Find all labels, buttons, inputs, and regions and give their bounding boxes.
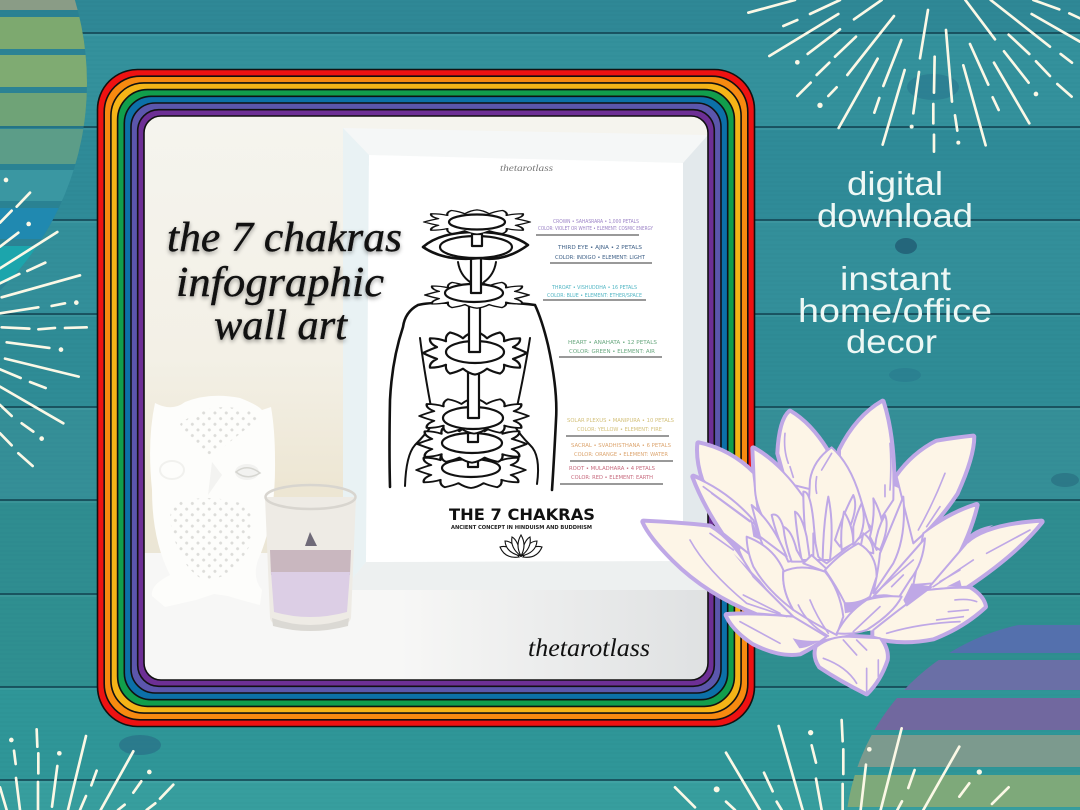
crown label: CROWN • SAHASRARA • 1,000 PETALS bbox=[553, 219, 639, 225]
starburst: bottom left bbox=[0, 729, 173, 810]
third eye chakra bbox=[423, 232, 528, 259]
side text: digital download, instant home/office decor: instant bbox=[840, 260, 951, 297]
side text: digital download, instant home/office decor bbox=[798, 165, 992, 360]
heart chakra bbox=[423, 306, 527, 375]
heart label: HEART • ANAHATA • 12 PETALS bbox=[568, 340, 657, 346]
starburst: left bbox=[0, 178, 87, 466]
poster signature: thetarotlass bbox=[500, 163, 554, 173]
lotus centre petal bbox=[807, 447, 870, 563]
picture frame bbox=[343, 128, 708, 590]
shop signature: thetarotlass bbox=[528, 635, 650, 662]
owl figurine bbox=[150, 396, 275, 578]
icon: large lotus flower bbox=[643, 402, 1042, 693]
poster subheading: ANCIENT CONCEPT IN HINDUISM AND BUDDHISM bbox=[451, 525, 592, 531]
title: the 7 chakras bbox=[167, 215, 402, 261]
starburst: top right bbox=[748, 0, 1080, 152]
wall and shelf bbox=[144, 116, 708, 680]
photo outline bbox=[144, 116, 708, 680]
side text: digital download, instant home/office decor: digital bbox=[847, 165, 943, 202]
lotus solid core bbox=[740, 463, 960, 640]
sacral label: COLOR: ORANGE • ELEMENT: WATER bbox=[574, 452, 669, 458]
decorative circle: bottom right striped bbox=[840, 625, 1080, 807]
poster sheet bbox=[366, 155, 683, 562]
solar plexus chakra bbox=[419, 372, 529, 434]
lotus lavender shadows bbox=[733, 517, 993, 648]
lotus outline silhouette bbox=[643, 402, 1042, 693]
throat label bbox=[543, 285, 646, 300]
sacral chakra bbox=[417, 425, 527, 463]
crown label bbox=[536, 219, 654, 235]
side text: digital download, instant home/office decor: decor bbox=[846, 323, 937, 360]
lotus outer petals bbox=[643, 402, 1042, 693]
root label bbox=[560, 466, 663, 484]
starburst: bottom right bbox=[675, 720, 1009, 810]
solar plexus label: COLOR: YELLOW • ELEMENT: FIRE bbox=[577, 427, 662, 433]
photo panel bbox=[144, 116, 708, 680]
third eye label: COLOR: INDIGO • ELEMENT: LIGHT bbox=[555, 255, 646, 261]
solar plexus label: SOLAR PLEXUS • MANIPURA • 10 PETALS bbox=[567, 418, 674, 424]
chakra labels bbox=[536, 219, 674, 484]
crown label: COLOR: VIOLET OR WHITE • ELEMENT: COSMIC ENERGY bbox=[538, 226, 654, 232]
root label: COLOR: RED • ELEMENT: EARTH bbox=[571, 475, 653, 481]
decorative circle: top left striped bbox=[0, 0, 87, 290]
lotus stamens bbox=[772, 492, 887, 562]
root label: ROOT • MULADHARA • 4 PETALS bbox=[569, 466, 655, 472]
poster heading: THE 7 CHAKRAS bbox=[449, 505, 595, 524]
crown chakra bbox=[424, 210, 530, 234]
rainbow border frame bbox=[98, 70, 754, 726]
chakra stack bbox=[416, 210, 530, 488]
body outline bbox=[390, 262, 556, 490]
title: wall art bbox=[214, 303, 348, 349]
root chakra bbox=[416, 452, 526, 488]
third eye label: THIRD EYE • AJNA • 2 PETALS bbox=[557, 245, 642, 251]
third eye label bbox=[550, 245, 652, 263]
icon: small lotus bbox=[500, 535, 542, 557]
throat chakra bbox=[425, 258, 529, 308]
title bbox=[167, 215, 402, 349]
heart label bbox=[559, 340, 662, 357]
sacral label: SACRAL • SVADHISTHANA • 6 PETALS bbox=[571, 443, 671, 449]
side text: digital download, instant home/office decor: home/office bbox=[798, 292, 992, 329]
candle in glass bbox=[265, 485, 356, 631]
heart label: COLOR: GREEN • ELEMENT: AIR bbox=[569, 349, 656, 355]
lotus petal detail lines bbox=[690, 433, 1030, 692]
throat label: COLOR: BLUE • ELEMENT: ETHER/SPACE bbox=[547, 293, 642, 299]
side text: digital download, instant home/office decor: download bbox=[817, 197, 973, 234]
sacral label bbox=[570, 443, 673, 461]
title: infographic bbox=[176, 260, 384, 306]
solar plexus label bbox=[566, 418, 674, 436]
lotus inner petals bbox=[747, 497, 925, 635]
throat label: THROAT • VISHUDDHA • 16 PETALS bbox=[551, 285, 637, 291]
